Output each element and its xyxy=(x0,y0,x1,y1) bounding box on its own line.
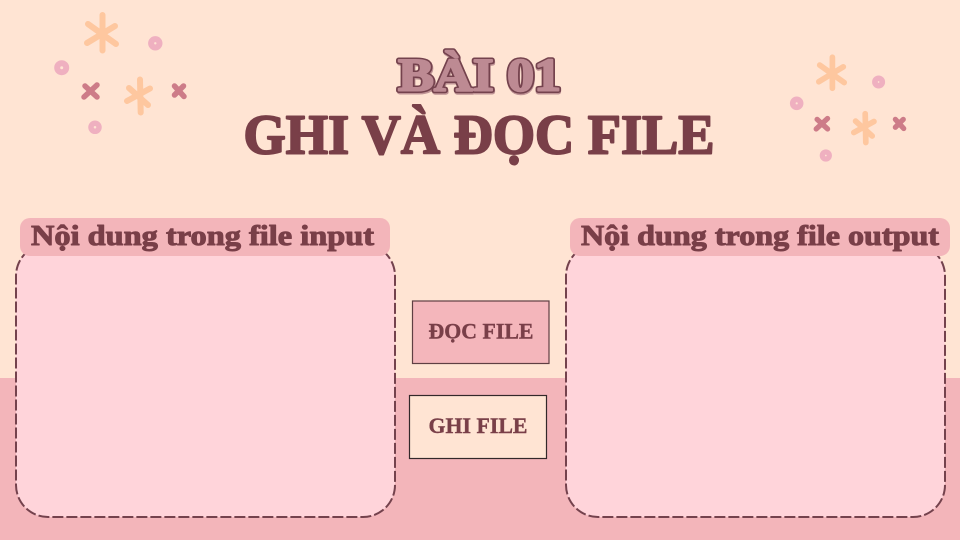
bottom background band xyxy=(0,378,960,540)
panel: output file xyxy=(566,218,950,517)
panel: input file xyxy=(16,218,395,517)
decoration: left sparkles xyxy=(57,15,184,131)
lesson label: BÀI 01 xyxy=(398,50,561,102)
panel heading: output: Nội dung trong file output xyxy=(581,221,940,252)
title: GHI VÀ ĐỌC FILE xyxy=(244,104,714,166)
button: write file: GHI FILE xyxy=(428,413,528,438)
panel heading: input: Nội dung trong file input xyxy=(31,221,375,252)
decoration: right sparkles xyxy=(793,57,904,159)
panel heading: output xyxy=(570,218,950,256)
lesson label: BÀI 01 xyxy=(399,51,561,103)
button: read file: ĐỌC FILE xyxy=(428,318,534,344)
panel heading: input xyxy=(20,218,390,256)
button: read file xyxy=(412,301,549,364)
button: write file xyxy=(410,396,546,458)
lesson label: BÀI 01 xyxy=(398,50,561,102)
